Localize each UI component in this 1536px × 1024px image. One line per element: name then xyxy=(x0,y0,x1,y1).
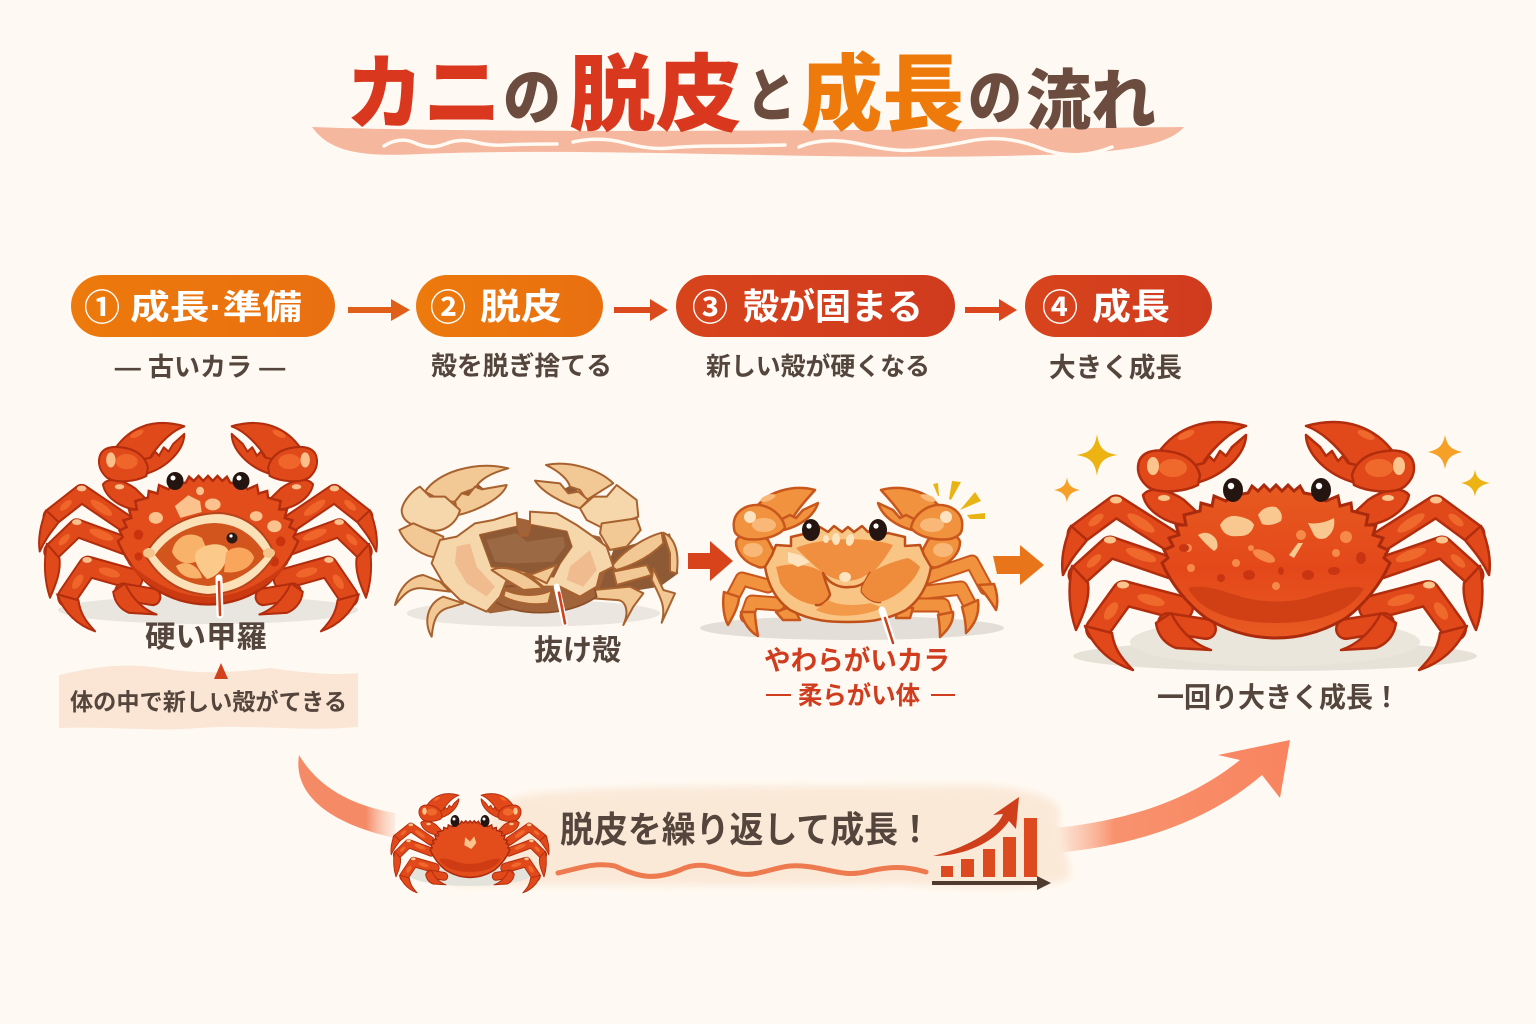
step 2 subtitle: 殻を脱ぎ捨てる xyxy=(431,351,612,381)
step 3 pill: 殻が固まる xyxy=(743,286,923,327)
step 4 pill: 成長 xyxy=(1092,286,1170,327)
title: と xyxy=(746,64,796,129)
title: カニ xyxy=(346,49,501,140)
arrow: crab 2 to crab 3 xyxy=(688,541,733,581)
label: soft shell: やわらがいカラ xyxy=(764,645,950,676)
label: cast-off shell: 抜け殻 xyxy=(534,634,621,667)
title: の xyxy=(503,64,561,133)
note box: new shell inside: 体の中で新しい殻がてきる xyxy=(70,688,347,715)
step 3 subtitle: 新しい殻が硬くなる xyxy=(706,352,930,381)
label: soft shell: 柔らがい体 xyxy=(798,681,920,710)
growth cycle curved arrow, left xyxy=(298,755,395,838)
label: grown bigger: 一回り大きく成長！ xyxy=(1157,682,1400,713)
arrow: step 2 to 3 xyxy=(614,299,668,321)
label: hard shell: 硬い甲羅 xyxy=(145,621,267,654)
sparkles xyxy=(1054,434,1490,503)
crab 1: hard shell with new shell inside xyxy=(39,423,377,631)
title ribbon xyxy=(312,127,1184,157)
step 3 pill: ③ xyxy=(692,287,728,328)
growth cycle curved arrow, right xyxy=(1056,740,1290,853)
legs xyxy=(723,562,997,637)
growth chart xyxy=(932,797,1051,890)
note box: new shell inside xyxy=(59,663,358,729)
right claw xyxy=(535,464,641,550)
wavy line xyxy=(558,865,926,876)
eyes xyxy=(802,519,887,541)
step 1 subtitle: — 古いカラ — xyxy=(115,352,285,382)
step 1 pill xyxy=(71,275,335,337)
title: 成長 xyxy=(801,48,964,142)
growth banner xyxy=(450,785,1070,890)
step 2 pill xyxy=(416,275,603,337)
title: の xyxy=(968,65,1022,132)
arrow: step 3 to 4 xyxy=(965,299,1017,321)
step 1 pill: 成長·準備 xyxy=(130,289,302,327)
crab 4: grown crab xyxy=(1054,422,1490,671)
title: 流れ xyxy=(1026,64,1156,138)
pointer line xyxy=(557,587,565,623)
shell xyxy=(765,526,931,622)
arrow: step 1 to 2 xyxy=(348,299,410,321)
left claw xyxy=(399,466,508,558)
shine rays xyxy=(933,481,985,519)
left legs xyxy=(395,575,463,637)
arrow: crab 3 to crab 4 xyxy=(993,545,1044,585)
shell body xyxy=(432,512,613,613)
step 1 pill: ① xyxy=(84,287,120,328)
pointer line xyxy=(882,610,893,643)
right legs xyxy=(593,533,678,625)
step 2 pill: 脱皮 xyxy=(480,286,562,327)
banner text: 脱皮を繰り返して成長！ xyxy=(560,809,932,850)
step 2 pill: ② xyxy=(430,287,466,328)
label: soft shell xyxy=(764,645,955,710)
title: 脱皮 xyxy=(569,48,742,142)
step 4 pill xyxy=(1025,275,1212,337)
crab 3: soft new shell xyxy=(700,481,1004,643)
eyes xyxy=(1223,478,1331,502)
title xyxy=(312,48,1184,157)
claws xyxy=(734,488,962,567)
pointer line xyxy=(219,578,220,615)
small crab xyxy=(391,794,549,893)
new shell window xyxy=(143,513,275,595)
eyes xyxy=(166,472,250,490)
step 3 pill xyxy=(676,275,955,337)
shell backing xyxy=(443,517,620,613)
step 4 subtitle: 大きく成長 xyxy=(1049,353,1182,383)
step 4 pill: ④ xyxy=(1042,287,1078,328)
crab 2: cast-off shell xyxy=(395,464,678,637)
